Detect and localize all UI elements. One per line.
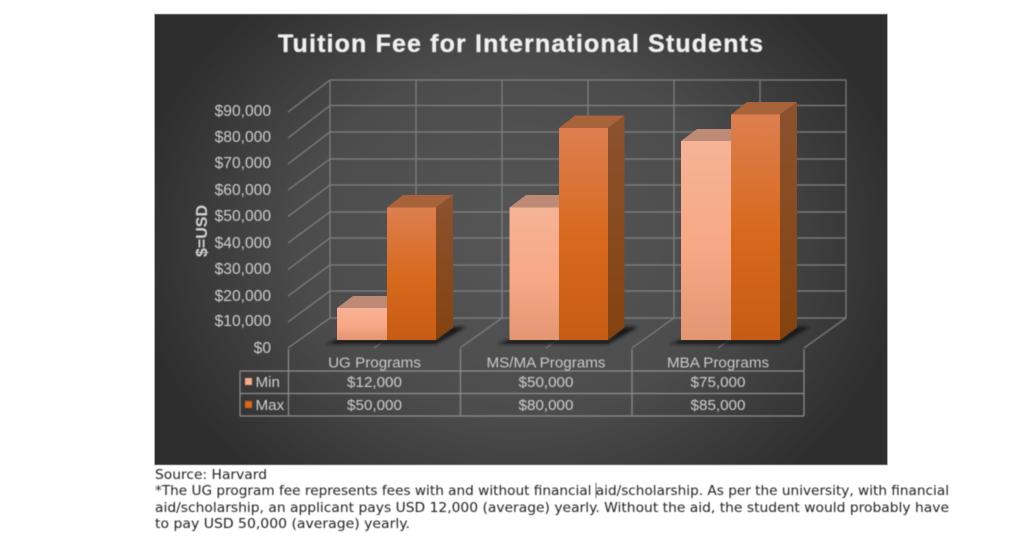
y-axis labels: $40,000 bbox=[215, 235, 271, 252]
y-axis labels: $60,000 bbox=[215, 182, 271, 199]
y-axis labels: $0 bbox=[254, 340, 271, 357]
title: Tuition Fee for International Students bbox=[278, 30, 763, 58]
y-axis labels: $50,000 bbox=[215, 208, 271, 225]
category labels: MBA Programs bbox=[667, 354, 769, 372]
legend and row: Min: $12,000 bbox=[347, 374, 402, 391]
source and footnote text bbox=[155, 467, 949, 532]
category labels: UG Programs bbox=[328, 354, 421, 372]
legend and row: Max: $80,000 bbox=[519, 397, 573, 414]
source and footnote text: *The UG program fee represents fees with and without financial aid/scholarship. As per the university, with financial bbox=[155, 483, 949, 499]
y-axis labels: $80,000 bbox=[215, 129, 271, 146]
category labels bbox=[328, 354, 769, 372]
y-axis labels bbox=[215, 103, 271, 357]
legend and row: Min: Min bbox=[256, 374, 280, 391]
legend and row: Max: $85,000 bbox=[691, 397, 745, 414]
y-axis labels: $70,000 bbox=[215, 155, 271, 172]
bars: MS/MA Programs bbox=[497, 116, 638, 344]
y-axis title: $=USD bbox=[194, 205, 211, 257]
y-axis labels: $10,000 bbox=[215, 313, 271, 330]
legend and row: Min: $75,000 bbox=[691, 374, 745, 391]
y-axis labels: $30,000 bbox=[215, 261, 271, 278]
data table bbox=[240, 349, 804, 416]
legend and row: Min: $50,000 bbox=[519, 374, 573, 391]
source and footnote text: Source: Harvard bbox=[155, 467, 267, 483]
bars: MBA Programs bbox=[669, 102, 810, 344]
y-axis labels: $20,000 bbox=[215, 288, 271, 305]
category labels: MS/MA Programs bbox=[486, 354, 606, 372]
legend and row: Max bbox=[245, 397, 745, 414]
panel: chart background bbox=[154, 14, 888, 465]
bars: UG Programs bbox=[325, 195, 466, 344]
legend and row: Max: Max bbox=[256, 397, 285, 414]
source and footnote text: to pay USD 50,000 (average) yearly. bbox=[155, 516, 410, 532]
legend and row: Min bbox=[245, 374, 745, 391]
y-axis labels: $90,000 bbox=[215, 103, 271, 120]
legend and row: Max: $50,000 bbox=[347, 397, 402, 414]
source and footnote text: aid/scholarship, an applicant pays USD 12,000 (average) yearly. Without the aid, the student would probably have bbox=[155, 500, 949, 516]
chart: 3D grid walls and floor bbox=[288, 80, 846, 348]
